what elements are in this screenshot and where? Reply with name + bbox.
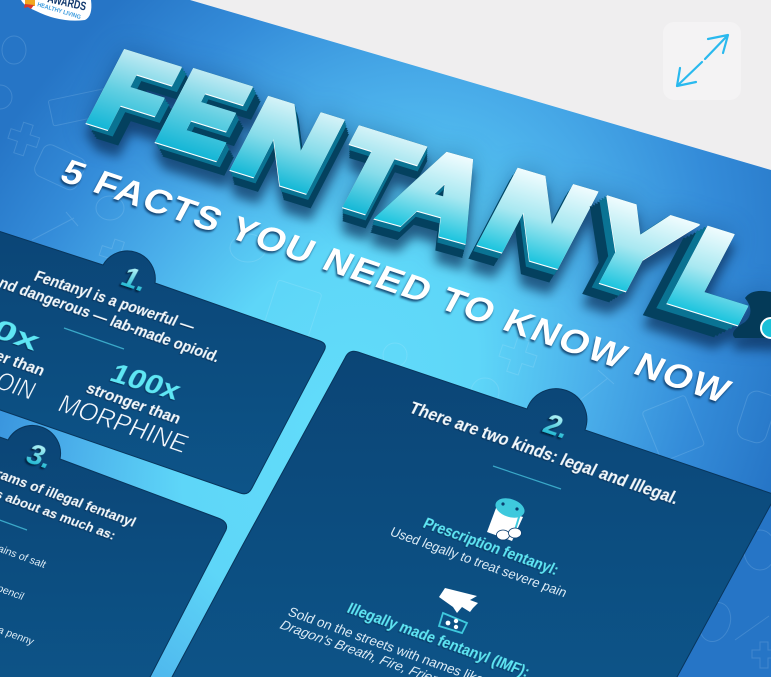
title: FENTANYL 3D lettering: T (314, 109, 433, 237)
title: FENTANYL 3D lettering: E (144, 52, 263, 178)
number 2: 2. (538, 409, 576, 445)
stat: 100x morphine (53, 358, 194, 458)
panel 3 comparisons (0, 530, 48, 648)
title: FENTANYL 3D lettering: N (465, 150, 610, 288)
subtitle: 5 FACTS YOU NEED TO KNOW NOW (54, 153, 738, 411)
title: FENTANYL 3D lettering: N (218, 79, 356, 212)
prescription fentanyl text: Prescription fentanyl: (420, 515, 561, 579)
number 3: 3. (21, 439, 59, 475)
panel 2 heading: There are two kinds: legal and Illegal. (406, 398, 683, 508)
stat: 100x morphine: MORPHINE (53, 389, 194, 458)
icon: prescription bottle and pills (487, 495, 527, 541)
panel 3: lethal dose (0, 425, 227, 677)
title period (733, 291, 771, 338)
panel 1: potency (0, 225, 325, 494)
title: FENTANYL 3D lettering: F (75, 32, 190, 158)
prescription fentanyl text: Used legally to treat severe pain (388, 524, 570, 600)
logo badge: HEALTHY LIVING (36, 2, 82, 21)
number 1: 1. (116, 262, 154, 298)
stat: 100x morphine: stronger than (83, 380, 183, 428)
expand icon button (663, 22, 741, 100)
stat: 50x heroin (0, 306, 47, 405)
title: FENTANYL 3D lettering: Y (563, 181, 702, 317)
title: FENTANYL 3D lettering: A (369, 127, 511, 260)
stat: 100x morphine: 100x (105, 358, 187, 406)
title: FENTANYL 3D lettering (75, 32, 771, 343)
logo badge (21, 0, 91, 21)
icon: hand over baggie (439, 588, 478, 633)
panel 1 intro text: Fentanyl is a powerful — (31, 268, 198, 335)
panel 2: two kinds (165, 351, 771, 677)
